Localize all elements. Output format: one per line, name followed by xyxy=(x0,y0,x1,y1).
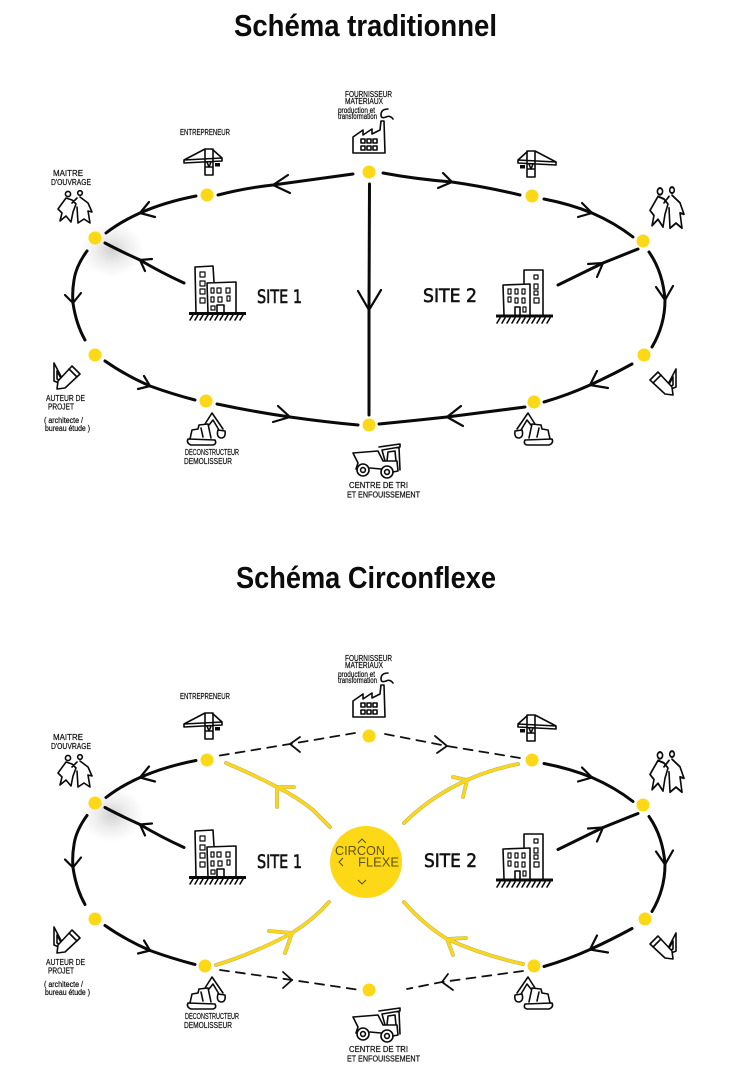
site 1 label: SITE 1 xyxy=(257,851,302,873)
panel: circonflexe diagram xyxy=(44,654,684,1064)
dashed arrow: fournisseur to entrepreneur site 2 xyxy=(385,734,520,758)
arrow: fournisseur to entrepreneur xyxy=(218,174,353,195)
logo: Circonflexe xyxy=(330,826,402,898)
arrow: fournisseur to entrepreneur site 2 xyxy=(383,173,520,195)
arrow: deconstructeur to centre de tri xyxy=(217,404,358,425)
panel: traditional diagram xyxy=(44,90,684,500)
title: Schéma traditionnel: Schéma traditionnel xyxy=(234,8,497,43)
dashed arrow: deconstructeur to centre de tri xyxy=(220,970,360,990)
flow arrows: outer ring xyxy=(65,196,673,402)
yellow arrow: deconstructeur to circonflexe xyxy=(216,902,329,965)
yellow arrow: deconstructeur site 2 to circonflexe xyxy=(404,902,523,964)
site 1 label: SITE 1 xyxy=(257,286,302,308)
drop shadow near maitre d'ouvrage xyxy=(80,223,144,277)
dashed arrow: deconstructeur site 2 to centre de tri xyxy=(407,971,523,990)
logo: Circonflexe: FLEXE xyxy=(358,854,399,870)
icons and labels xyxy=(44,90,684,500)
arrow: fournisseur to centre de tri xyxy=(358,184,381,415)
site 2 label: SITE 2 xyxy=(424,850,477,872)
dashed arrow: fournisseur to entrepreneur xyxy=(217,733,355,756)
title: Schéma Circonflexe: Schéma Circonflexe xyxy=(236,560,496,595)
logo: Circonflexe: CIRCON xyxy=(335,843,385,858)
drop shadow near maitre d'ouvrage xyxy=(80,788,144,842)
icons and labels xyxy=(44,654,684,1064)
yellow arrow: circonflexe to entrepreneur xyxy=(226,763,330,827)
site 2 label: SITE 2 xyxy=(423,285,477,307)
nodes xyxy=(88,166,650,432)
arrow: deconstructeur site 2 to centre de tri xyxy=(379,406,525,426)
yellow arrow: circonflexe to entrepreneur site 2 xyxy=(404,764,518,823)
flow arrows: outer ring xyxy=(65,760,673,966)
nodes xyxy=(88,730,652,996)
